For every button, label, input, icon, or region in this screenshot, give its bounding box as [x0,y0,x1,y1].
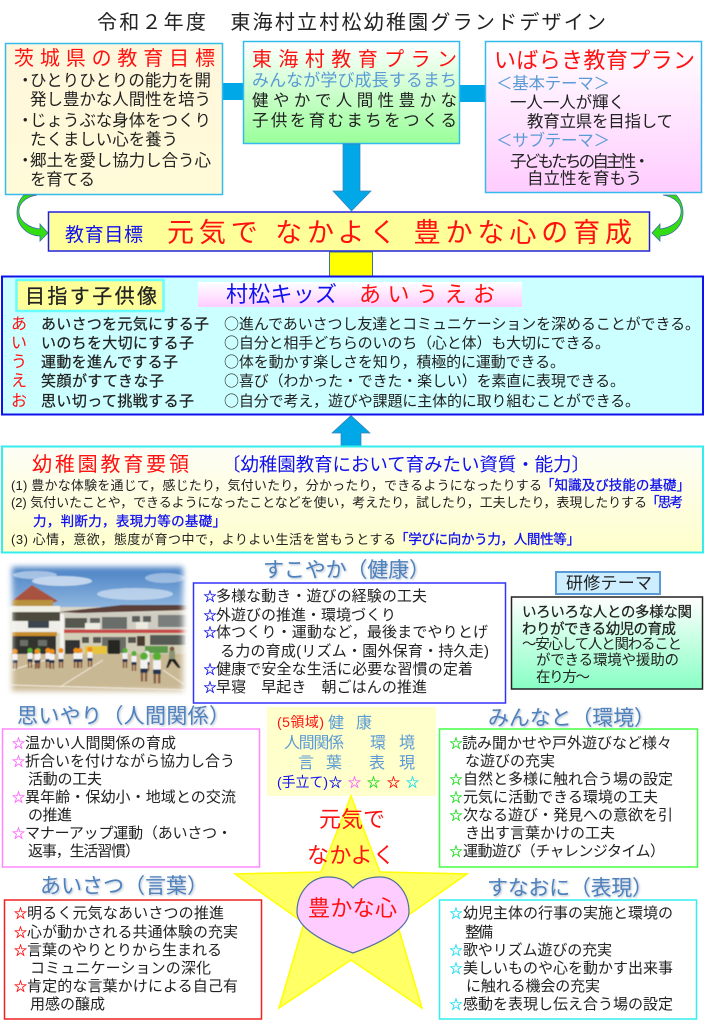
panel: education goal [48,212,650,251]
heading: ibaraki goals: 茨城県の教育目標 [14,47,215,70]
panel: ibaraki education plan: 一人一人が輝く [510,93,625,112]
domain names: 言 葉 [298,754,342,772]
row: o: 思い切って挑戦する子 [41,393,194,410]
star legend: ☆ [367,772,380,791]
sub theme: ＜サブテーマ＞ [496,130,610,150]
panel: tokai village education plan [244,42,460,144]
plan text: 子供を育むまちをつくる [252,111,457,130]
goals list: ・ [17,152,34,170]
row: a: ○進んであいさつし友達とコミュニケーションを深めることができる。 [224,313,700,334]
connector: yellow block [330,252,372,276]
star legend: ☆ [348,772,361,791]
panel: training theme: いろいろな人との多様な関 [522,603,692,621]
heading: minna to: みんなと（環境） [488,707,655,730]
heading: curriculum: 幼稚園教育要領 [32,453,189,476]
goal text: 元気で なかよく 豊かな心の育成 [167,218,632,248]
row: e: え [11,373,27,390]
item: ☆ [14,922,27,941]
label: five domains: (5領域) [277,714,324,730]
item: マナーアップ運動（あいさつ・ [25,825,232,842]
item 3 emphasis: 「学びに向かう力，人間性等」 [395,531,580,547]
star text: genki de: 元気で [319,807,385,832]
item: ☆ [204,605,217,624]
panel: training theme: わりができる幼児の育成 [522,621,676,638]
item continued: る力の育成(リズム・園外保育・持久走) [220,643,489,660]
panel: sukoyaka [194,583,506,703]
heading: sunao ni: すなおに（表現） [487,877,653,900]
row: i: ○自分と相手どちらのいのち（心と体）も大切にできる。 [224,332,610,353]
plan text [252,91,457,130]
banner: muramatsu kids [198,282,522,307]
panel: minna to [440,729,698,867]
banner: muramatsu kids: あいうえお [359,282,495,307]
row: o: お [11,392,27,410]
panel: training theme: ができる環境や援助の [536,652,679,669]
item 2 emphasis: 「思考 [646,495,683,510]
item: 肯定的な言葉かけによる自己有 [27,978,238,995]
heart text: 豊かな心 [308,896,397,921]
panel: ibaraki education plan: 子どもたちの自主性・ [510,152,650,171]
item 1: (1) 豊かな体験を通じて，感じたり，気付いたり，分かったり，できるようになったりする [11,478,542,493]
row: e: ○喜び（わかった・できた・楽しい）を素直に表現できる。 [224,370,625,391]
panel: training theme: ～安心して人と関わること [522,636,682,653]
item continued: き出す言葉かけの工夫 [465,825,615,842]
item: ☆ [204,586,217,605]
item: ☆ [12,733,25,752]
row: e: 笑顔がすてきな子 [41,373,164,390]
slogan: みんなが学び成長するまち [252,71,457,90]
panel: kindergarten curriculum [2,446,703,552]
item: 美しいものや心を動かす出来事 [463,960,673,977]
panel: ideal child [2,276,703,414]
goals list: たくましい心を養う [30,130,178,149]
plan text: 健やかで人間性豊かな [252,91,457,110]
item: 健康で安全な生活に必要な習慣の定着 [216,660,473,678]
heading: tokai plan: 東海村教育プラン [252,48,457,71]
star legend: ☆ [406,772,419,791]
row: o [11,390,640,411]
item: ☆ [450,805,463,824]
item continued: 整備 [465,924,493,941]
item: 外遊びの推進・環境づくり [216,607,396,624]
item 2: (2) 気付いたことや，できるようになったことなどを使い，考えたり，試したり，工夫したり，表現したりする [11,495,647,510]
goals list: ・ [17,112,34,130]
row: a [11,313,700,334]
item continued: 活動の工夫 [28,771,102,788]
badge: ideal child [16,280,164,311]
goals list: を育てる [30,170,95,189]
badge: ideal child: 目指す子供像 [25,285,157,308]
heading: aisatsu: あいさつ（言葉） [40,875,208,898]
item: ☆ [450,787,463,806]
item: 幼児主体の行事の実施と環境の [463,905,673,922]
star legend: ☆ [387,772,400,791]
goals list: ・ [17,72,34,90]
row: i [11,332,610,353]
heading: omoiyari: 思いやり（人間関係） [17,705,230,728]
star legend: ☆ [329,772,342,791]
label: methods: (手立て) [277,774,328,790]
banner: muramatsu kids: 村松キッズ [226,282,337,307]
domain names: 環 境 [370,734,415,752]
item: 感動を表現し伝え合う場の設定 [463,996,673,1013]
panel: training theme [512,597,702,689]
row: u: 運動を進んでする子 [41,354,178,371]
item 2 emphasis continued: 力，判断力，表現力等の基礎」 [33,513,226,529]
row: u [11,351,565,372]
panel: training theme: 在り方～ [536,669,590,686]
row: o: ○自分で考え，遊びや課題に主体的に取り組むことができる。 [224,390,640,411]
item continued: の推進 [28,807,72,824]
item 1 emphasis: 「知識及び技能の基礎」 [541,477,690,493]
basic theme: ＜基本テーマ＞ [496,74,610,93]
panel: ibaraki education plan: 自立性を育もう [527,169,642,188]
item continued: な遊びの充実 [465,753,555,770]
item continued: 返事，生活習慣） [28,842,140,860]
item: 自然と多様に触れ合う場の設定 [463,770,673,788]
arrow: up [332,416,370,446]
item: 次なる遊び・発見への意欲を引 [463,807,673,824]
item: 体つくり・運動など，最後までやりとげ [216,624,488,641]
item: ☆ [14,976,27,995]
heart [297,877,409,953]
row: e [11,370,625,391]
item: ☆ [450,769,463,788]
row: a: あ [11,315,27,333]
row: i: い [11,335,27,352]
item continued: 用感の醸成 [30,996,105,1013]
item: 心が動かされる共通体験の充実 [27,924,238,941]
item: 元気に活動できる環境の工夫 [463,789,658,806]
panel: ibaraki education goals [6,44,222,194]
panel: aisatsu [4,900,262,1019]
item continued: コミュニケーションの深化 [30,960,211,977]
arrow: curved right [652,195,683,241]
item: 折合いを付けながら協力し合う [25,753,235,770]
heading: sukoyaka: すこやか（健康） [263,559,430,582]
item: 多様な動き・遊びの経験の工夫 [216,587,427,605]
item: ☆ [204,677,217,696]
arrow: curved left [17,195,48,241]
badge: training theme: 研修テーマ [566,574,652,593]
row: u: ○体を動かす楽しさを知り，積極的に運動できる。 [224,351,565,372]
item: ☆ [450,940,463,959]
item: ☆ [204,622,217,641]
panel: omoiyari [2,729,260,867]
item: ☆ [450,841,463,860]
item: 歌やリズム遊びの充実 [463,942,612,959]
arrow: down to goal [333,144,371,211]
photo: kindergarten building and children [5,560,190,700]
item: 明るく元気なあいさつの推進 [27,905,224,922]
star: center [235,796,467,1008]
goals list [17,71,212,189]
item: ☆ [12,787,25,806]
panel: ibaraki education plan [486,42,702,192]
item: ☆ [14,903,27,922]
item: ☆ [12,751,25,770]
row: i: いのちを大切にする子 [41,335,194,352]
item: ☆ [450,994,463,1013]
item: ☆ [450,958,463,977]
star legend [329,772,419,791]
star text: nakayoku: なかよく [307,843,395,868]
goals list: 発し豊かな人間性を培う [30,90,211,109]
heading: ibaraki plan: いばらき教育プラン [494,48,695,73]
panel: sunao ni [440,900,696,1019]
row: u: う [11,354,27,371]
item: 異年齢・保幼小・地域との交流 [25,789,236,806]
panel: ibaraki education plan: 教育立県を目指して [527,112,673,131]
domain names: 健 康 [328,714,372,732]
connector: right bar [459,85,486,102]
goals list: ひとりひとりの能力を開 [30,71,211,90]
item: 早寝 早起き 朝ごはんの推進 [216,679,427,696]
item: 運動遊び（チャレンジタイム） [463,843,665,860]
item: ☆ [450,733,463,752]
goal label: 教育目標 [65,224,143,246]
goals list: 郷土を愛し協力し合う心 [30,151,212,170]
item 3: (3) 心情，意欲，態度が育つ中で，よりよい生活を営もうとする [11,532,396,547]
item: ☆ [204,659,217,678]
item: 言葉のやりとりから生まれる [27,942,222,959]
domain names [284,714,415,772]
title: 令和２年度 東海村立村松幼稚園グランドデザイン [97,11,606,34]
item: 温かい人間関係の育成 [25,735,176,752]
subheading: competencies: 〔幼稚園教育において育みたい資質・能力〕 [222,454,590,475]
panel: five domains [267,707,436,796]
domain names: 表 現 [369,754,415,772]
domain names: 人間関係 [284,734,344,752]
item: ☆ [450,903,463,922]
item: ☆ [12,823,25,842]
item: ☆ [14,940,27,959]
goals list: じょうぶな身体をつくり [30,111,211,130]
item continued: に触れる機会の充実 [466,978,600,995]
row: a: あいさつを元気にする子 [41,316,209,333]
item: 読み聞かせや戸外遊びなど様々 [462,735,672,752]
connector: left bar [222,83,244,100]
